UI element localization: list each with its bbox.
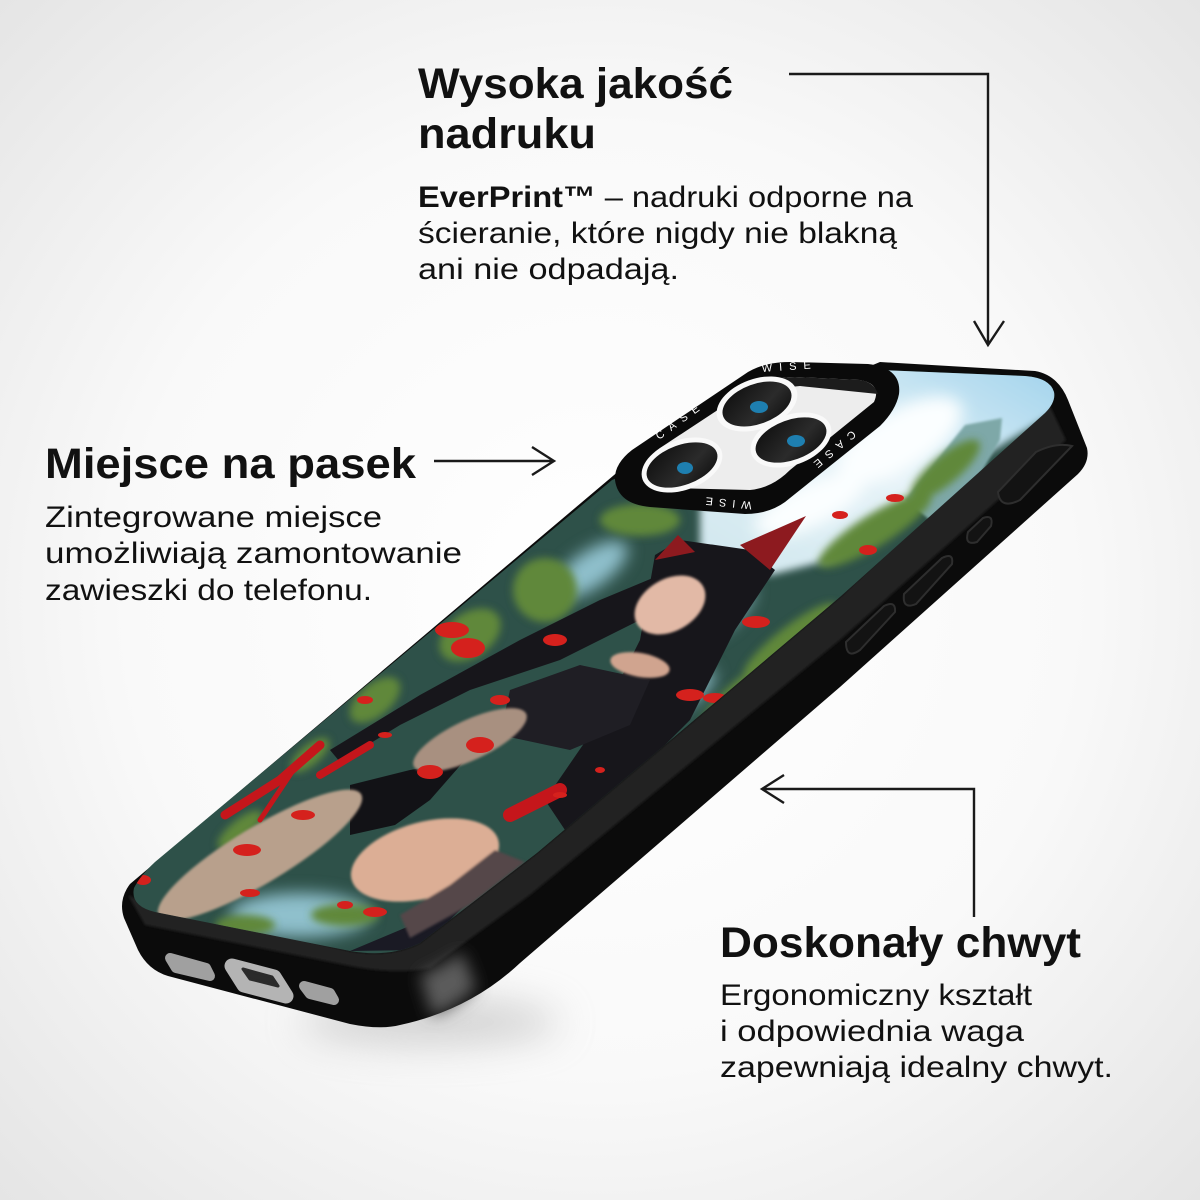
description	[45, 501, 462, 607]
foliage	[212, 431, 988, 935]
abstract dark mass	[330, 540, 775, 951]
description: zapewniają idealny chwyt.	[720, 1051, 1113, 1084]
description	[418, 181, 913, 286]
clouds	[752, 388, 969, 540]
muted warm patches	[144, 563, 716, 940]
camera island: CASE	[806, 428, 858, 474]
description: umożliwiają zamontowanie	[45, 537, 462, 570]
heading: Wysoka jakość	[418, 60, 733, 108]
lens	[634, 427, 730, 503]
description: ani nie odpadają.	[418, 253, 679, 286]
camera island: WISE	[699, 494, 752, 511]
arrow	[762, 775, 974, 917]
arrow	[434, 447, 554, 475]
red ribbons	[225, 745, 560, 820]
phone shadow	[300, 1000, 560, 1044]
lens	[709, 366, 805, 442]
ears	[740, 516, 806, 570]
printed artwork	[134, 370, 1054, 954]
description: Ergonomiczny kształt	[720, 979, 1033, 1012]
description: ścieranie, które nigdy nie blakną	[418, 217, 897, 250]
description: EverPrint™ – nadruki odporne na	[418, 181, 913, 214]
brand text on bumper: CASE	[654, 399, 708, 442]
phone case	[100, 350, 1088, 1027]
case body	[122, 362, 1088, 1027]
bumper inner band	[128, 402, 1066, 971]
heading: Doskonały chwyt	[720, 919, 1081, 967]
bumper corner highlight	[420, 952, 476, 1016]
side buttons	[846, 445, 1072, 654]
description: Zintegrowane miejsce	[45, 501, 382, 534]
misty water patches	[230, 530, 762, 937]
callout: print quality	[418, 60, 1004, 345]
heading: nadruku	[418, 110, 596, 158]
port cutouts	[170, 958, 334, 1000]
heading: Miejsce na pasek	[45, 440, 416, 488]
description: zawieszki do telefonu.	[45, 574, 372, 607]
arrow	[789, 74, 1004, 345]
callout: perfect grip	[720, 775, 1113, 1084]
callout: strap slot	[45, 440, 554, 607]
mountain	[905, 418, 1002, 520]
flowers	[135, 494, 904, 917]
camera island	[615, 359, 899, 514]
description	[720, 979, 1113, 1084]
sky	[700, 360, 1060, 575]
heading	[418, 60, 733, 158]
camera island: WISE	[761, 359, 818, 375]
description: i odpowiednia waga	[720, 1015, 1024, 1048]
lens	[743, 402, 839, 478]
